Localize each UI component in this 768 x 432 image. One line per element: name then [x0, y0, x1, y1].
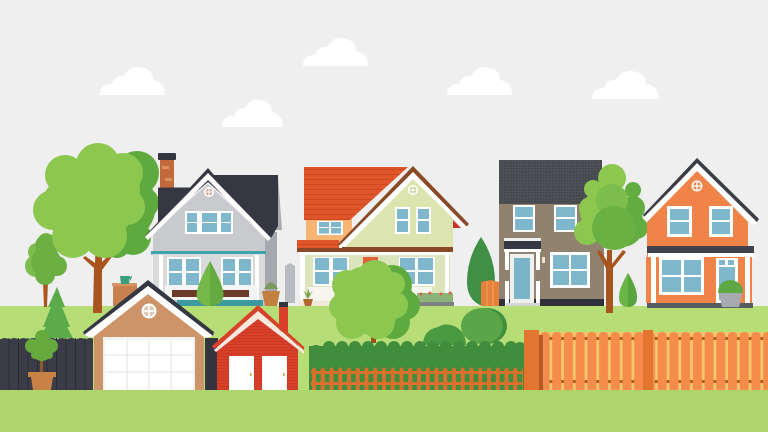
lower wall: [646, 257, 752, 303]
red shed: [212, 302, 304, 390]
potted plant: [25, 330, 58, 390]
wall: [217, 313, 298, 390]
red roof tip: [453, 220, 461, 228]
orange house: [643, 158, 759, 308]
side wall: [264, 232, 277, 306]
potted plant gray house: [262, 282, 280, 306]
teal band: [151, 251, 266, 254]
upper window: [185, 211, 233, 234]
door canopy: [504, 238, 541, 252]
clouds: [100, 38, 659, 127]
fence posts: [524, 330, 653, 390]
chimney: [158, 153, 176, 202]
dark roof: [145, 168, 278, 238]
shingled roof: [499, 160, 602, 204]
orange gate: [481, 280, 499, 306]
small porch roof: [297, 240, 339, 249]
roof white trim: [145, 173, 271, 241]
dark fence: [0, 338, 218, 390]
front grass strip: [0, 390, 768, 432]
wall: [153, 184, 265, 306]
gable trim: [338, 166, 469, 247]
wall: [345, 176, 453, 250]
flower bed: [417, 292, 454, 306]
round window: [692, 180, 702, 192]
base: [647, 303, 753, 308]
lower window: [659, 257, 704, 295]
red door: [363, 257, 378, 297]
upper windows: [513, 205, 577, 232]
middle tree: [329, 260, 420, 343]
shrub cone: [197, 261, 223, 306]
railing: [299, 287, 432, 306]
upper orange wall: [306, 218, 352, 242]
chimney: [279, 302, 288, 332]
planter: [718, 280, 743, 307]
roof: [83, 280, 214, 336]
green-yellow house: [297, 166, 469, 306]
hedge: [309, 341, 526, 376]
brick planter behind garage: [112, 274, 137, 306]
wall: [499, 204, 604, 306]
porch wall: [300, 252, 450, 303]
roof: [643, 158, 759, 222]
large tree: [33, 143, 159, 313]
wall: [647, 170, 748, 306]
columns: [651, 257, 656, 303]
railing: [165, 285, 257, 300]
right door: [262, 356, 287, 390]
bushes behind hedge: [423, 308, 507, 345]
cone bush: [619, 273, 637, 307]
small tree left: [25, 233, 67, 307]
brown house: [499, 160, 604, 306]
gable windows: [395, 207, 431, 234]
upper windows: [667, 206, 733, 237]
gray house: [145, 153, 282, 306]
wall lamp: [542, 257, 545, 263]
large orange fence: [524, 330, 768, 390]
porch: [153, 254, 265, 305]
porch windows: [313, 257, 435, 286]
garage door: [103, 337, 195, 390]
gray post: [285, 263, 295, 303]
tile roof: [304, 167, 408, 220]
door: [505, 252, 540, 306]
pot: [303, 288, 313, 306]
pine tree: [40, 287, 73, 338]
gable round window: [408, 185, 418, 195]
right tree: [574, 164, 648, 313]
lower window: [550, 252, 590, 288]
base: [499, 299, 604, 306]
brown band: [342, 247, 453, 252]
lawn: [0, 306, 768, 390]
door: [716, 258, 738, 303]
left door: [229, 356, 254, 390]
roof: [212, 305, 304, 350]
wall: [94, 287, 204, 390]
cypress tree: [467, 237, 495, 306]
garage: [83, 280, 214, 390]
gable round window: [204, 187, 214, 197]
round window: [142, 304, 156, 318]
porch windows: [167, 257, 253, 287]
upper left window: [317, 221, 343, 235]
small orange fence: [309, 367, 525, 390]
dark band: [647, 246, 754, 253]
teal base: [177, 300, 263, 306]
